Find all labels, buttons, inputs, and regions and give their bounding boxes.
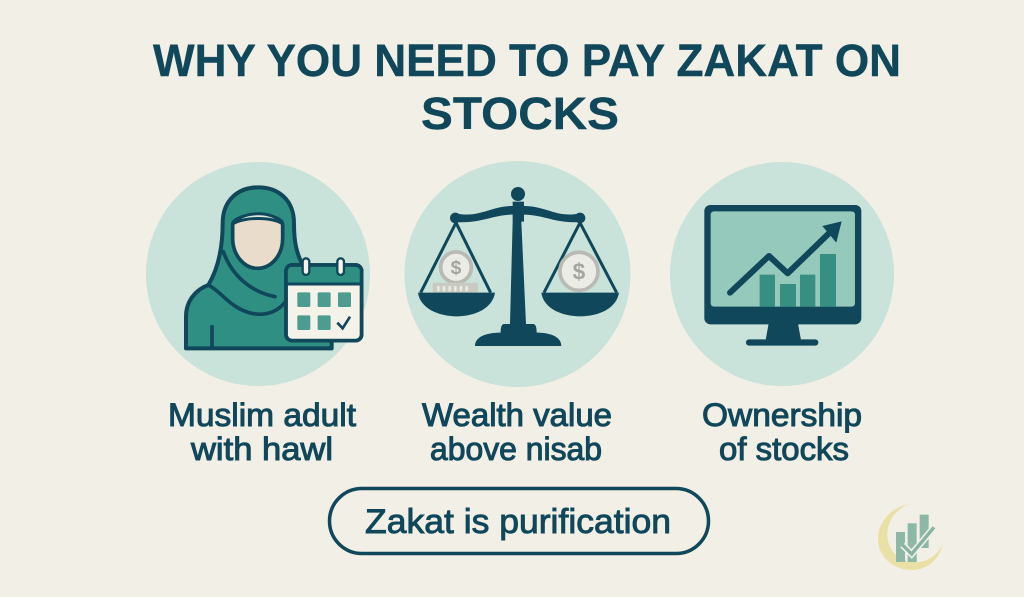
label: of stocks — [719, 431, 849, 467]
title: WHY YOU NEED TO PAY ZAKAT ON — [153, 35, 901, 86]
icon: logo watermark — [878, 504, 943, 570]
icon: balance scale with coins: $ — [451, 258, 462, 279]
circle background — [146, 162, 370, 386]
callout: zakat is purification: Zakat is purification — [365, 503, 671, 541]
callout: zakat is purification — [330, 488, 708, 554]
label: with hawl — [190, 431, 333, 467]
circle background — [404, 161, 630, 387]
icon: balance scale with coins: $ — [573, 258, 586, 284]
icon: monitor with rising chart — [704, 205, 861, 346]
label — [422, 397, 612, 467]
title — [153, 35, 901, 139]
circle background — [670, 162, 894, 386]
icon: woman in hijab with calendar — [186, 187, 362, 348]
panel: wealth value above nisab — [404, 161, 630, 467]
panel: muslim adult with hawl — [146, 162, 370, 467]
label — [702, 397, 862, 467]
label: Wealth value — [422, 397, 612, 433]
label: above nisab — [430, 431, 602, 467]
title: STOCKS — [421, 88, 619, 139]
label: Ownership — [702, 397, 862, 433]
panel: ownership of stocks — [670, 162, 894, 467]
label: Muslim adult — [168, 397, 356, 433]
icon: balance scale with coins — [418, 187, 619, 346]
label — [168, 397, 356, 467]
